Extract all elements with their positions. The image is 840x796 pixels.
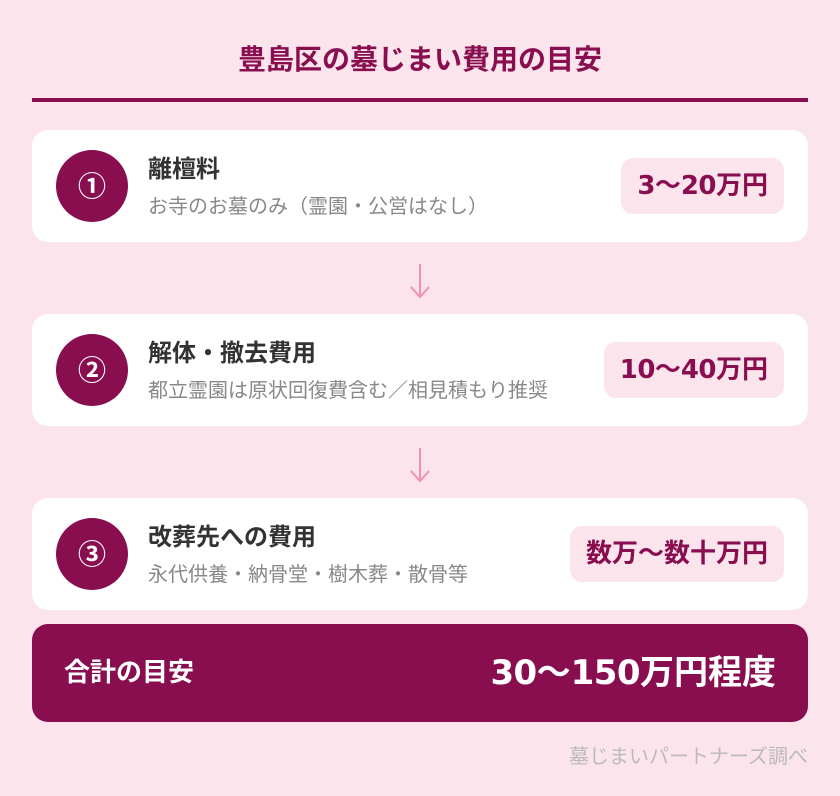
total value: 30〜150万円程度	[490, 653, 776, 693]
step 1 description: お寺のお墓のみ（霊園・公営はなし）	[148, 194, 488, 218]
source note: 墓じまいパートナーズ調べ	[569, 744, 808, 768]
step 1 heading: 離檀料	[148, 155, 220, 183]
step number 3: ③	[78, 533, 106, 573]
total label: 合計の目安	[64, 658, 194, 688]
step 2 cost badge: 10〜40万円	[620, 355, 768, 385]
step number 2: ②	[78, 349, 106, 389]
step number 2	[56, 334, 128, 406]
panel: total	[32, 624, 808, 722]
step number 3	[56, 518, 128, 590]
step 3 cost badge: 数万〜数十万円	[586, 539, 768, 569]
step number 1	[56, 150, 128, 222]
step 1 cost badge: 3〜20万円	[637, 171, 768, 201]
step 2 description: 都立霊園は原状回復費含む／相見積もり推奨	[148, 378, 548, 402]
panel: step 2	[32, 314, 808, 426]
step 3 description: 永代供養・納骨堂・樹木葬・散骨等	[148, 562, 468, 586]
step 3 cost badge	[570, 526, 784, 582]
title: 豊島区の墓じまい費用の目安	[238, 43, 602, 76]
panel: step 1	[32, 130, 808, 242]
step 1 cost badge	[621, 158, 784, 214]
step 3 heading: 改葬先への費用	[148, 523, 316, 551]
step number 1: ①	[78, 165, 106, 205]
step 2 cost badge	[604, 342, 784, 398]
arrow: step 2 to 3	[410, 448, 430, 482]
panel: step 3	[32, 498, 808, 610]
step 2 heading: 解体・撤去費用	[148, 339, 316, 367]
arrow: step 1 to 2	[410, 264, 430, 298]
